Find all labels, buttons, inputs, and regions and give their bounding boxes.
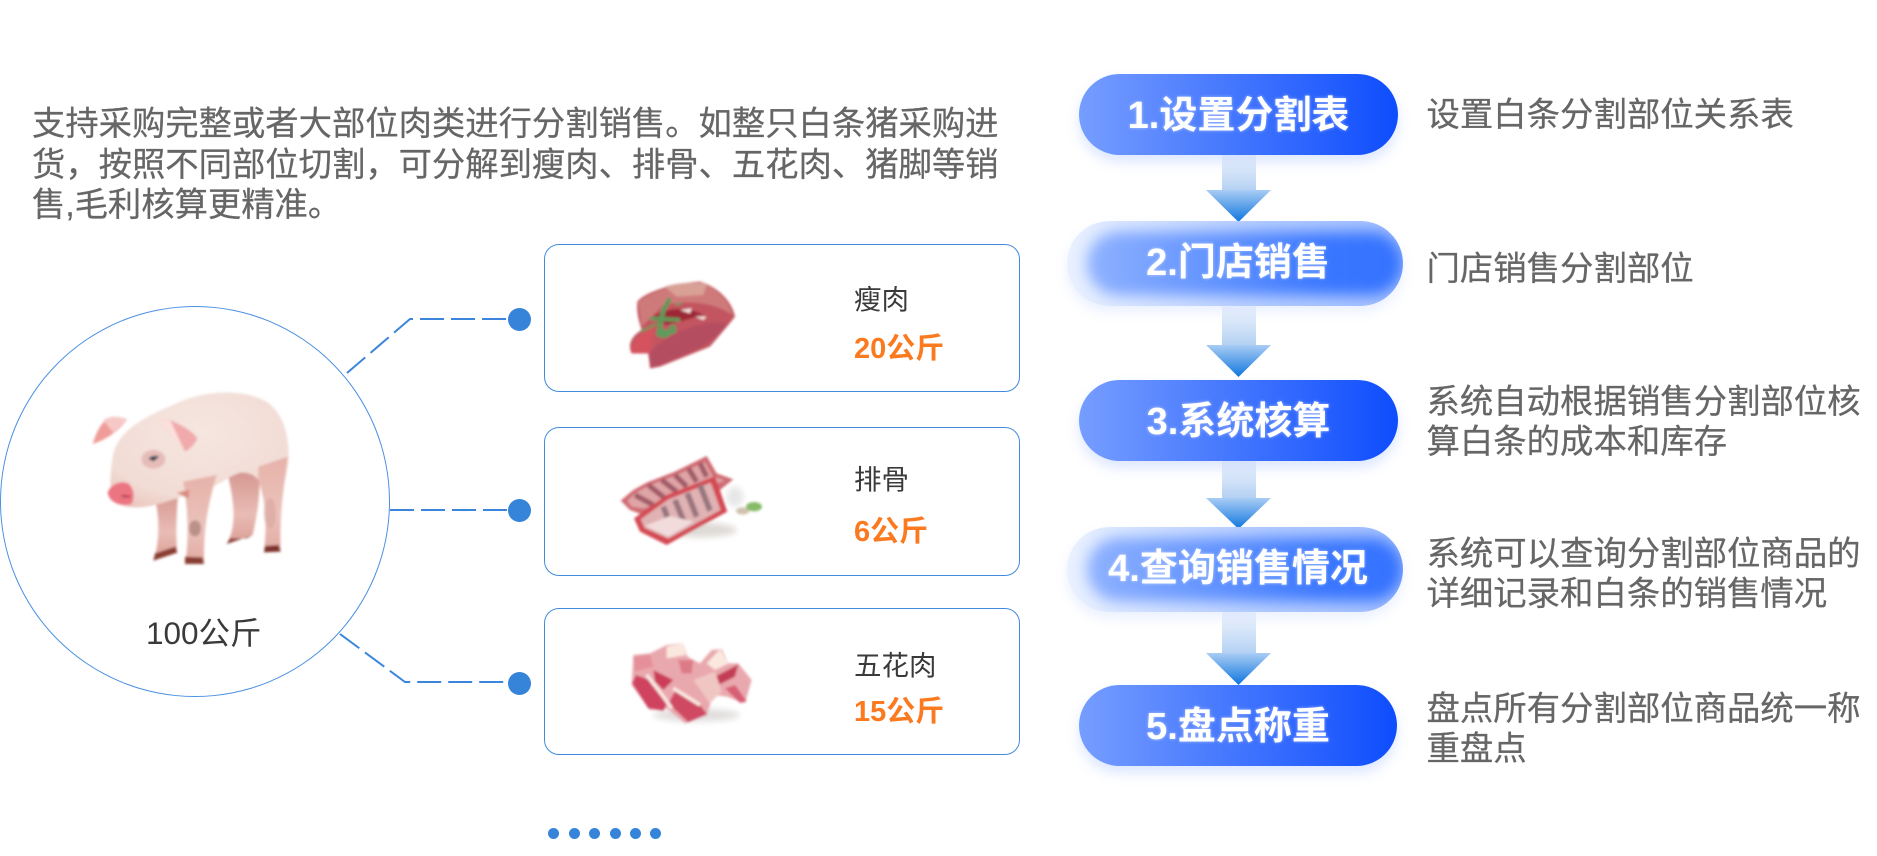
step 4 button xyxy=(1067,527,1403,612)
lean meat weight: 20公斤 xyxy=(854,333,944,365)
icon: pork belly xyxy=(630,642,753,725)
icon: lean meat xyxy=(628,280,736,370)
card: lean meat xyxy=(544,244,1020,392)
step 5 button xyxy=(1079,685,1397,766)
connector lines xyxy=(340,318,507,683)
step 5 button: 5.盘点称重 xyxy=(1146,706,1330,748)
card: ribs xyxy=(544,427,1020,576)
ellipsis dots xyxy=(548,828,661,839)
step 1 description: 设置白条分割部位关系表 xyxy=(1426,97,1794,134)
step 4 description: 系统可以查询分割部位商品的 xyxy=(1426,536,1861,573)
lean meat name: 瘦肉 xyxy=(854,284,909,315)
step 4 description: 详细记录和白条的销售情况 xyxy=(1426,576,1827,613)
step 2 button xyxy=(1067,221,1403,306)
step 1 button: 1.设置分割表 xyxy=(1128,95,1349,137)
step 3 description: 算白条的成本和库存 xyxy=(1426,424,1727,461)
step 2 description: 门店销售分割部位 xyxy=(1426,251,1694,288)
card: pork belly xyxy=(544,608,1020,755)
intro paragraph: 售,毛利核算更精准。 xyxy=(32,187,341,224)
step 3 button: 3.系统核算 xyxy=(1147,401,1330,443)
whole pig circle xyxy=(0,306,390,697)
step 5 description xyxy=(1426,691,1861,768)
step 4 description xyxy=(1426,536,1861,613)
step 2 button: 2.门店销售 xyxy=(1146,242,1330,284)
step 3 description: 系统自动根据销售分割部位核 xyxy=(1426,384,1861,421)
icon: pig xyxy=(92,392,290,566)
intro paragraph: 支持采购完整或者大部位肉类进行分割销售。如整只白条猪采购进 xyxy=(32,106,999,143)
intro paragraph: 货，按照不同部位切割，可分解到瘦肉、排骨、五花肉、猪脚等销 xyxy=(32,146,999,184)
step 3 button xyxy=(1079,380,1398,461)
arrows between steps xyxy=(1206,155,1271,685)
whole weight label: 100公斤 xyxy=(146,615,262,651)
step 5 description: 盘点所有分割部位商品统一称 xyxy=(1426,691,1861,728)
step 1 button xyxy=(1079,74,1398,155)
pork belly name: 五花肉 xyxy=(854,650,936,681)
ribs weight: 6公斤 xyxy=(854,516,928,548)
ribs name: 排骨 xyxy=(854,464,909,495)
connector dot xyxy=(508,499,531,522)
pork belly weight: 15公斤 xyxy=(854,696,944,728)
intro paragraph xyxy=(32,106,999,224)
step 4 button: 4.查询销售情况 xyxy=(1108,548,1368,590)
step 5 description: 重盘点 xyxy=(1426,731,1527,768)
icon: ribs xyxy=(620,454,764,546)
step 3 description xyxy=(1426,384,1861,461)
connector dot xyxy=(508,672,531,695)
connector dot xyxy=(508,308,531,331)
